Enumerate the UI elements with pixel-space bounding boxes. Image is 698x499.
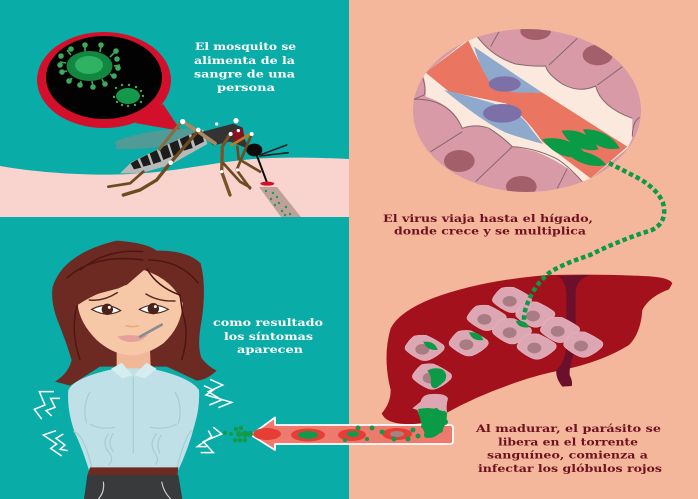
fringe xyxy=(93,260,144,295)
shirt xyxy=(68,368,199,473)
panel: mosquito bite xyxy=(0,32,349,217)
parasites leaving the arrow xyxy=(223,426,253,442)
text: liver caption: El virus viaja hasta el hígado, xyxy=(383,213,593,225)
text: mosquito caption: El mosquito se xyxy=(195,41,296,53)
thermometer xyxy=(140,325,162,337)
text: bloodstream caption: Al madurar, el parásito se xyxy=(475,423,661,435)
text: symptoms caption: como resultado xyxy=(213,317,323,329)
text: mosquito caption: persona xyxy=(217,82,275,94)
red vessel xyxy=(426,41,627,178)
green parasites xyxy=(542,129,620,166)
skirt xyxy=(84,475,182,499)
panel: liver xyxy=(382,275,672,424)
text: mosquito caption: alimenta de la xyxy=(194,55,295,67)
hepatocytes xyxy=(405,287,603,389)
burst cell xyxy=(412,394,448,415)
panel: peach right background xyxy=(349,0,698,499)
eyebrows xyxy=(89,293,175,301)
text: liver caption: donde crece y se multiplica xyxy=(394,226,586,238)
nuclei xyxy=(489,76,521,92)
blue endothelial cells xyxy=(444,47,543,144)
arrow: bloodstream xyxy=(223,418,453,450)
icon: mosquito xyxy=(108,118,288,195)
hair strands xyxy=(67,251,198,360)
parasite cluster bursting into the vessel xyxy=(418,408,448,438)
dotted path of parasite xyxy=(524,163,664,320)
panel: teal left background xyxy=(0,0,349,499)
text: liver caption xyxy=(383,213,593,238)
face xyxy=(78,270,183,355)
text: bloodstream caption: libera en el torrente xyxy=(498,436,638,448)
icon: large virus xyxy=(58,43,120,89)
skin band xyxy=(0,158,349,217)
parasites in cells xyxy=(423,321,529,350)
panel: sick woman xyxy=(34,241,232,499)
red blood cells xyxy=(253,428,281,440)
icon: small virus xyxy=(113,84,144,107)
vein xyxy=(556,275,590,387)
text: bloodstream caption: infectar los glóbulos rojos xyxy=(478,463,662,475)
hair back xyxy=(52,241,217,386)
mouth xyxy=(117,335,148,342)
parasite cluster in cell xyxy=(427,368,446,388)
nose xyxy=(126,323,138,329)
text: symptoms caption: los síntomas xyxy=(224,331,313,343)
shiver marks xyxy=(34,379,232,456)
liver cells base xyxy=(409,27,646,197)
text: symptoms caption: aparecen xyxy=(237,344,304,356)
green parasites in blood xyxy=(343,426,420,442)
cream sinusoid band xyxy=(423,37,632,182)
eyes xyxy=(92,303,168,315)
text: bloodstream caption xyxy=(475,423,662,475)
text: mosquito caption xyxy=(194,41,296,94)
shirt folds xyxy=(73,377,192,468)
collar xyxy=(111,363,157,379)
belt xyxy=(87,467,178,475)
cell borders xyxy=(414,32,640,188)
text: bloodstream caption: sanguíneo, comienza a xyxy=(487,450,648,462)
text: mosquito caption: sangre de una xyxy=(194,68,295,80)
speech bubble with viruses xyxy=(37,32,181,131)
liver shape xyxy=(382,275,672,424)
panel: liver tissue magnified xyxy=(413,29,641,192)
neck xyxy=(117,350,151,377)
text: symptoms caption xyxy=(213,317,323,356)
icon: blood vessel in skin xyxy=(259,187,301,217)
